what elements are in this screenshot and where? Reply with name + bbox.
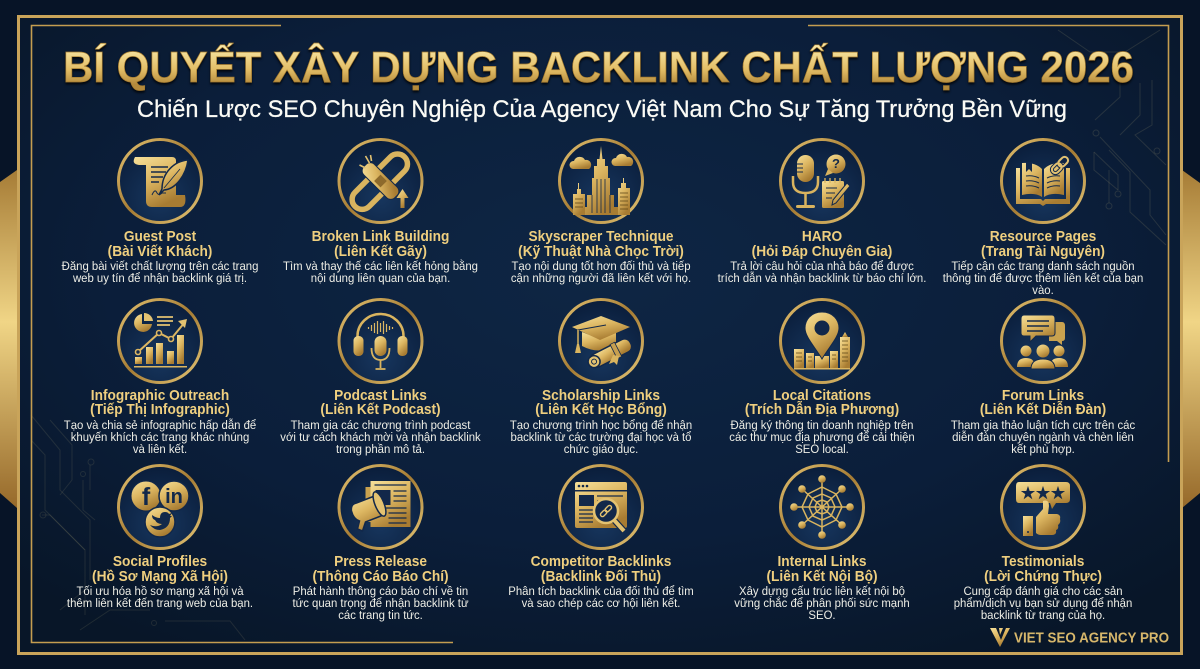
- description: phẩm/dịch vụ bạn sử dụng để nhận: [954, 597, 1132, 610]
- description: vào.: [1032, 284, 1054, 297]
- description: các trang tin tức.: [338, 609, 423, 622]
- description: diễn đàn chuyên ngành và chèn liên: [952, 431, 1134, 444]
- description: backlink từ trang của họ.: [981, 609, 1105, 622]
- card: Competitor Backlinks: [508, 466, 694, 610]
- icon: social network badges: in: [165, 486, 183, 508]
- logo: Viet SEO Agency Pro: [990, 628, 1169, 647]
- heading: (Liên Kết Nội Bộ): [766, 568, 878, 584]
- description: trích dẫn và nhận backlink từ báo chí lớn.: [718, 272, 926, 285]
- heading: [766, 553, 878, 584]
- icon: map pin and city: [780, 300, 864, 382]
- heading: [984, 553, 1102, 584]
- description: Trả lời câu hỏi của nhà báo để được: [730, 260, 914, 273]
- card: Infographic Outreach: [64, 300, 256, 456]
- heading: (Trích Dẫn Địa Phương): [745, 401, 899, 417]
- heading: [90, 387, 230, 417]
- description: Tối ưu hóa hồ sơ mạng xã hội và: [76, 585, 244, 598]
- icon: microphone and notepad: ?: [832, 156, 840, 171]
- title: BÍ QUYẾT XÂY DỰNG BACKLINK CHẤT LƯỢNG 2026: [63, 42, 1134, 92]
- description: Tìm và thay thế các liên kết hỏng bằng: [283, 260, 478, 273]
- heading: Podcast Links: [334, 387, 427, 403]
- icon: rating bubble and thumbs up: ★: [1020, 485, 1036, 502]
- heading: Resource Pages: [990, 228, 1096, 244]
- circuit pattern: bottom left: [31, 415, 245, 640]
- heading: Internal Links: [777, 553, 867, 569]
- description: [734, 585, 910, 622]
- description: và liên kết.: [133, 443, 187, 456]
- heading: [980, 387, 1106, 417]
- icon: scroll and quill: [118, 140, 202, 222]
- description: trong phần mô tả.: [336, 443, 425, 456]
- description: Đăng bài viết chất lượng trên các trang: [62, 260, 258, 273]
- description: vững chắc để phân phối sức mạnh: [734, 597, 910, 610]
- icon: rating bubble and thumbs up: ★: [1050, 485, 1066, 502]
- icon: skyscraper and clouds: [560, 140, 642, 222]
- icon: graduation cap and diploma: [560, 300, 642, 382]
- description: SEO local.: [795, 443, 849, 456]
- heading: (Hỏi Đáp Chuyên Gia): [752, 243, 892, 259]
- heading: (Hồ Sơ Mạng Xã Hội): [92, 568, 228, 584]
- icon: microphone and notepad: [780, 140, 864, 222]
- right gold side ornament: [1182, 170, 1200, 508]
- heading: [518, 228, 684, 259]
- description: Tham gia thảo luận tích cực trên các: [951, 419, 1135, 432]
- circuit pattern: top right: [1058, 30, 1166, 245]
- description: [292, 585, 469, 622]
- description: với tư cách khách mời và nhận backlink: [280, 431, 481, 444]
- description: Phát hành thông cáo báo chí về tin: [293, 585, 468, 598]
- brand name: VIET SEO AGENCY PRO: [1014, 630, 1169, 646]
- description: Phân tích backlink của đối thủ để tìm: [508, 585, 694, 598]
- description: Tham gia các chương trình podcast: [291, 419, 471, 432]
- icon: rating bubble and thumbs up: ★: [1035, 485, 1051, 502]
- heading: Infographic Outreach: [91, 387, 229, 403]
- description: [943, 260, 1143, 297]
- description: cận những người đã liên kết với họ.: [511, 272, 691, 285]
- heading: (Thông Cáo Báo Chí): [312, 568, 449, 584]
- heading: [108, 228, 212, 259]
- icon: open book with link: [1002, 140, 1084, 222]
- description: Tiếp cận các trang danh sách nguồn: [951, 260, 1135, 273]
- description: [510, 419, 692, 456]
- card: Guest Post: [62, 140, 258, 285]
- heading: (Liên Kết Gãy): [334, 243, 427, 259]
- description: Cung cấp đánh giá cho các sản: [963, 585, 1123, 598]
- card: Testimonials: [954, 466, 1132, 622]
- description: SEO.: [808, 609, 836, 622]
- icon: chat bubbles and people: [1002, 300, 1084, 382]
- icon: chain with bandage: [339, 140, 422, 222]
- card: Skyscraper Technique: [511, 140, 691, 285]
- description: Đăng ký thông tin doanh nghiệp trên: [731, 419, 913, 432]
- description: khuyến khích các trang khác nhúng: [71, 431, 249, 444]
- description: và sao chép các cơ hội liên kết.: [522, 597, 680, 610]
- description: thông tin để được thêm liên kết của bạn: [943, 272, 1143, 285]
- heading: Press Release: [334, 553, 427, 569]
- description: [729, 419, 915, 456]
- description: [508, 585, 694, 610]
- heading: Skyscraper Technique: [528, 228, 674, 244]
- heading: [981, 228, 1105, 259]
- icon: social network badges: f: [142, 483, 151, 511]
- heading: (Liên Kết Học Bổng): [535, 401, 667, 417]
- description: [951, 419, 1135, 456]
- heading: [745, 387, 899, 417]
- description: kết phù hợp.: [1011, 443, 1075, 456]
- heading: (Tiếp Thị Infographic): [90, 401, 230, 417]
- card: Internal Links: [734, 466, 910, 622]
- icon: spider web network: [780, 466, 864, 548]
- heading: [312, 228, 449, 259]
- heading: (Bài Viết Khách): [108, 243, 212, 259]
- heading: [535, 387, 667, 417]
- heading: Social Profiles: [113, 553, 207, 569]
- description: Tạo nội dung tốt hơn đối thủ và tiếp: [511, 260, 691, 273]
- description: chức giáo dục.: [564, 443, 638, 456]
- heading: Local Citations: [773, 387, 871, 403]
- card: Local Citations: [729, 300, 915, 456]
- card: Broken Link Building: [283, 140, 478, 285]
- heading: [531, 553, 672, 584]
- card: Press Release: [292, 466, 469, 622]
- heading: (Backlink Đối Thủ): [541, 568, 661, 584]
- icon: charts: [118, 300, 202, 382]
- heading: [752, 228, 892, 259]
- heading: [320, 387, 441, 417]
- icon: newspaper and megaphone: [339, 466, 422, 548]
- card: Social Profiles: [67, 466, 253, 610]
- description: [67, 585, 253, 610]
- icon: browser with magnifier: [560, 466, 642, 548]
- card: Forum Links: [951, 300, 1135, 456]
- description: web uy tín để nhận backlink giá trị.: [72, 272, 247, 285]
- card: Podcast Links: [280, 300, 481, 456]
- heading: [312, 553, 449, 584]
- description: [283, 260, 478, 285]
- description: [64, 419, 256, 456]
- heading: Scholarship Links: [542, 387, 660, 403]
- heading: Testimonials: [1002, 553, 1084, 569]
- description: backlink từ các trường đại học và tổ: [511, 431, 691, 444]
- icon: rating bubble and thumbs up: [1002, 466, 1084, 548]
- description: [718, 260, 926, 285]
- heading: (Trang Tài Nguyên): [981, 243, 1105, 259]
- heading: Guest Post: [124, 228, 196, 244]
- heading: (Liên Kết Diễn Đàn): [980, 401, 1106, 417]
- description: tức quan trọng để nhận backlink từ: [292, 597, 469, 610]
- heading: HARO: [802, 228, 842, 244]
- subtitle: Chiến Lược SEO Chuyên Nghiệp Của Agency Việt Nam Cho Sự Tăng Trưởng Bền Vững: [137, 96, 1067, 123]
- heading: [92, 553, 228, 584]
- description: Tạo và chia sẻ infographic hấp dẫn để: [64, 419, 256, 432]
- description: [280, 419, 481, 456]
- heading: Forum Links: [1002, 387, 1084, 403]
- heading: (Liên Kết Podcast): [320, 401, 441, 417]
- icon: logo mark: [990, 628, 1010, 647]
- card: Scholarship Links: [510, 300, 692, 456]
- left gold side ornament: [0, 170, 17, 508]
- description: nội dung liên quan của bạn.: [311, 272, 450, 285]
- card: HARO: [718, 140, 926, 285]
- description: [62, 260, 258, 285]
- description: các thư mục địa phương để cải thiện: [729, 431, 915, 444]
- description: thêm liên kết đến trang web của bạn.: [67, 597, 253, 610]
- heading: (Kỹ Thuật Nhà Chọc Trời): [518, 243, 684, 259]
- heading: (Lời Chứng Thực): [984, 568, 1102, 584]
- icon: social network badges: [118, 466, 202, 548]
- card: Resource Pages: [943, 140, 1143, 297]
- description: Xây dựng cấu trúc liên kết nội bộ: [739, 585, 905, 598]
- icon: headphones and microphone: [339, 300, 422, 382]
- description: [954, 585, 1132, 622]
- description: [511, 260, 691, 285]
- heading: Competitor Backlinks: [531, 553, 672, 569]
- description: Tạo chương trình học bổng để nhận: [510, 419, 692, 432]
- heading: Broken Link Building: [312, 228, 449, 244]
